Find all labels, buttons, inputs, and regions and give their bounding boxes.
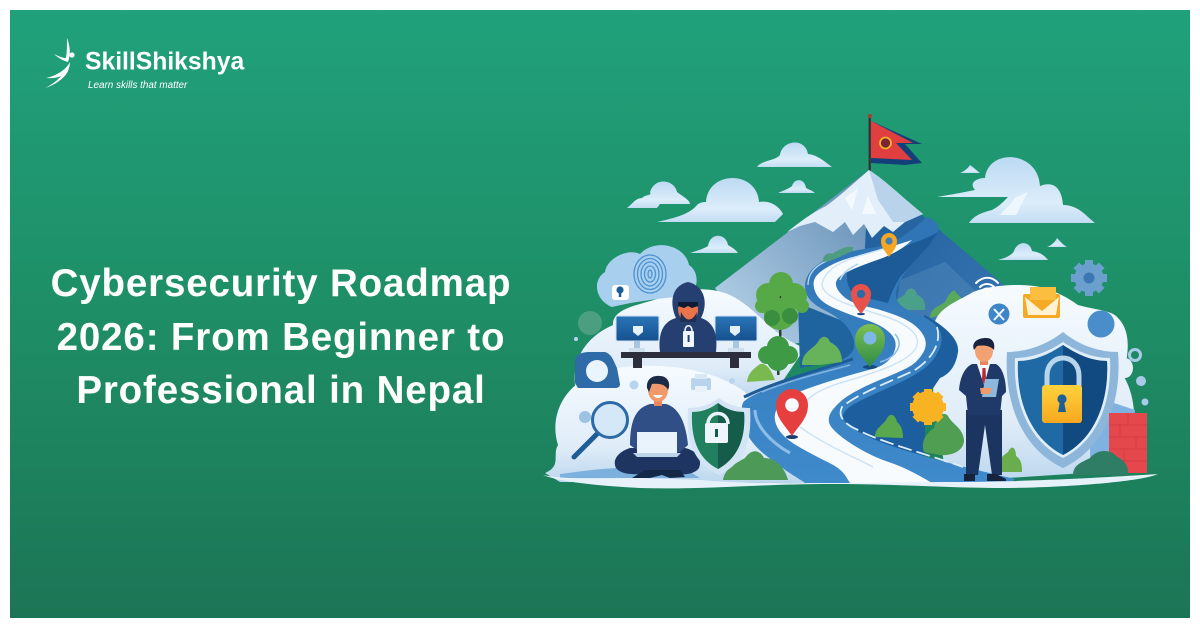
- shirt and tie: [977, 364, 990, 385]
- bushes lower: [723, 414, 1022, 480]
- sun-lit cloud highlight: [1000, 192, 1028, 215]
- ground plate: [543, 474, 1158, 488]
- icon: blue sphere: [1088, 310, 1114, 338]
- ribbon left stripes: [744, 256, 899, 453]
- monitor right: [715, 316, 757, 352]
- pin: red lower: [776, 389, 808, 439]
- icon: leaping figure: [45, 38, 75, 88]
- legs: [966, 410, 1002, 475]
- icon: camera: [575, 352, 620, 388]
- monitor left: [616, 316, 659, 352]
- hacker at desk: [616, 282, 757, 368]
- snow mound: left lower: [545, 366, 805, 483]
- dark road pocket: [847, 232, 938, 303]
- standing man: [959, 338, 1006, 481]
- laptop: [637, 432, 677, 453]
- title: Professional in Nepal: [76, 369, 486, 412]
- red brick wall: [1109, 413, 1147, 473]
- legs: [615, 448, 700, 475]
- tablet: [982, 379, 999, 397]
- jacket: [959, 364, 1006, 415]
- large blue shield: [1007, 332, 1119, 468]
- left mound shadow: [560, 467, 700, 478]
- title: Cybersecurity Roadmap: [51, 262, 511, 305]
- pin: green: [855, 324, 885, 369]
- torso: [630, 404, 688, 452]
- hazy virus icon: [578, 311, 602, 335]
- logo tagline: Learn skills that matter: [88, 80, 188, 91]
- icon: envelope: [1023, 287, 1060, 318]
- winding road: [742, 217, 1015, 484]
- road surface: [775, 240, 932, 483]
- logo: [45, 38, 244, 91]
- hands: [980, 388, 992, 394]
- mountain: [715, 170, 1010, 360]
- right mound shadow: [1090, 395, 1135, 470]
- snow mound: left upper: [575, 289, 805, 400]
- dark valley right: [835, 315, 958, 472]
- feet: [632, 470, 685, 478]
- dark bush right: [1073, 451, 1128, 475]
- flag: [868, 114, 922, 171]
- pin: orange: [881, 233, 897, 257]
- small gears: [1117, 350, 1148, 406]
- icon: cloud lock: [612, 285, 629, 300]
- road base: [742, 217, 1015, 484]
- icon: magnifying glass: [574, 402, 628, 457]
- icon: printer: [691, 374, 711, 392]
- shoes: [964, 474, 1006, 481]
- ribbon right stripe: [841, 327, 963, 467]
- trees and bushes centre: [747, 272, 842, 382]
- head: [647, 376, 669, 406]
- bushes on mountain: [895, 288, 965, 318]
- small bush by upper road: [823, 247, 853, 262]
- bubbles: [574, 337, 735, 414]
- dark valley centre: [798, 303, 858, 368]
- hooded hacker: [660, 282, 716, 352]
- icon: blue gear: [1071, 260, 1107, 296]
- desk: [621, 352, 751, 368]
- yellow gear: [910, 389, 946, 425]
- lower road faint lines: [800, 427, 873, 467]
- fingerprint cloud: [597, 245, 697, 307]
- icon: fingerprint: [634, 255, 666, 293]
- icon: gold padlock: [1042, 358, 1082, 423]
- icon: green shield lock: [705, 414, 728, 443]
- clouds: [627, 142, 1095, 260]
- title: [51, 262, 511, 412]
- pins on road: [776, 233, 897, 439]
- title: 2026: From Beginner to: [57, 316, 505, 359]
- snow mound: right: [931, 285, 1134, 482]
- icon: wifi: [976, 278, 998, 295]
- illustration: [543, 114, 1158, 488]
- green shield: [688, 398, 750, 475]
- seated man with laptop: [615, 376, 700, 478]
- road centre line: [803, 247, 917, 407]
- head: [973, 338, 994, 365]
- icon: tools bubble: [988, 304, 1010, 324]
- logo wordmark: SkillShikshya: [85, 48, 244, 76]
- pin: red upper: [851, 284, 871, 315]
